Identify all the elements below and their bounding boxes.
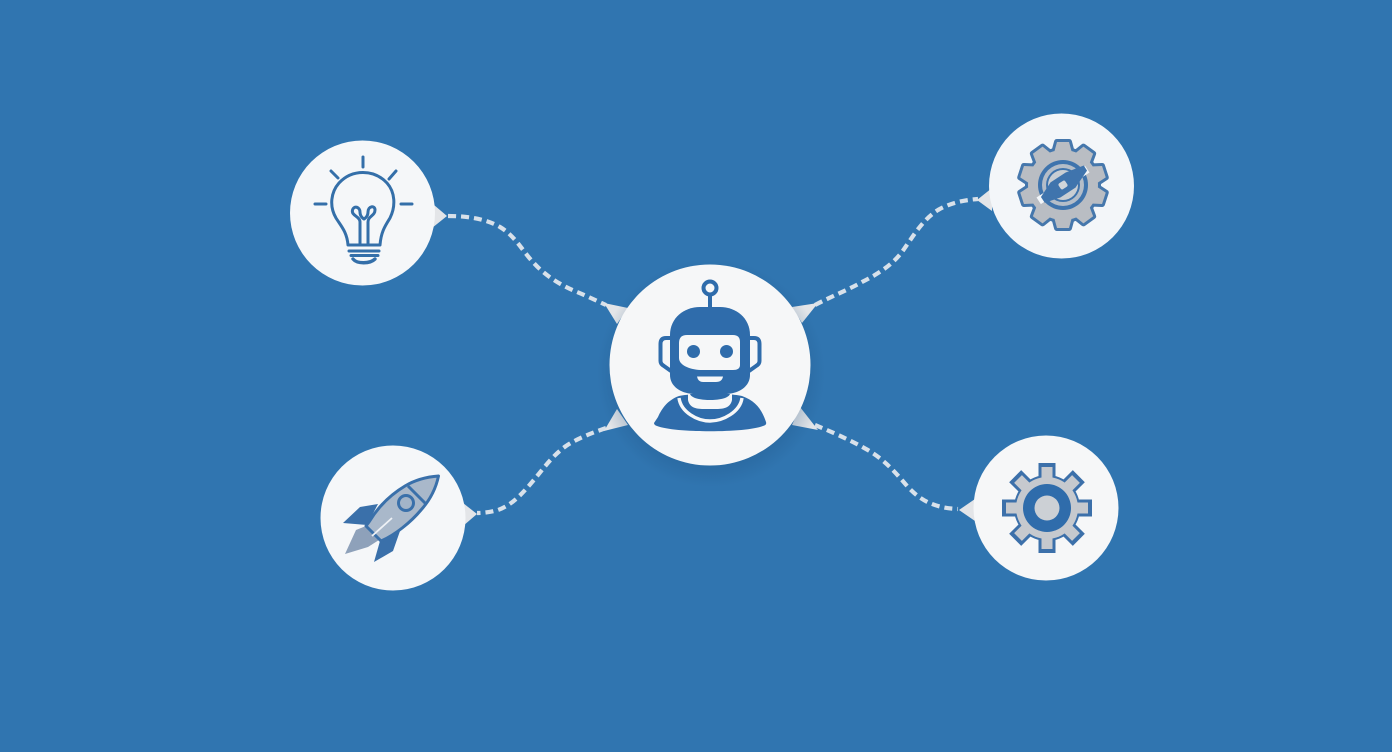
ears [660,338,760,371]
connector: cog to robot [792,188,992,323]
gear outline [1019,142,1107,228]
gear fill [1006,467,1088,549]
window [398,496,414,510]
screw base [349,245,379,256]
node: rocket [320,446,466,590]
connector: lightbulb to robot [432,205,628,324]
icon: rocket [343,476,438,562]
rays [315,157,412,204]
node: lightbulb [290,140,435,286]
connector: rocket to robot [463,409,628,526]
mouth [697,376,723,382]
node: cog with wrench [989,114,1134,258]
hub ring [1023,484,1071,532]
flame [345,526,379,554]
antenna [704,282,716,309]
icon: gear [1002,463,1092,553]
central node: robot [597,259,825,487]
visor [679,335,740,370]
icon: cog with wrench [1019,142,1107,228]
gear fill [1019,142,1107,228]
body [366,476,438,541]
inner ring [1038,160,1088,210]
wrench [1034,162,1092,208]
body [654,394,766,431]
highlight [372,518,392,536]
head [670,307,750,394]
node: gear [974,436,1118,580]
fins [343,504,400,562]
necklace [679,398,742,421]
icon: robot [654,282,766,431]
glass [332,172,394,245]
gear outline [1002,463,1092,553]
neck [688,394,732,409]
hub center [1034,496,1060,520]
filament [352,207,375,245]
nose divider [408,486,426,504]
connector: gear to robot [792,407,975,521]
eyes [687,345,733,358]
icon: lightbulb [315,157,412,263]
